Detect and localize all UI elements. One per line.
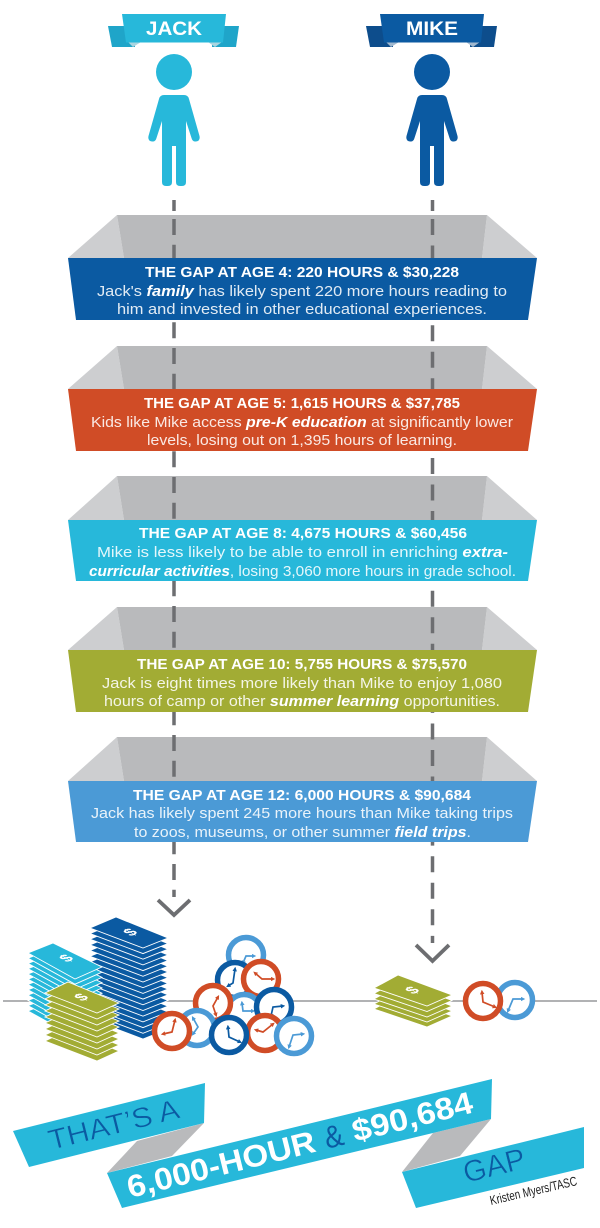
panel: gap at age 10: THE GAP AT AGE 10: 5,755 HOURS & $75,570 (137, 656, 467, 673)
box back: age 8 (68, 476, 537, 520)
panel: gap at age 12: Jack has likely spent 245 more hours than Mike taking trips (91, 805, 513, 822)
panel: gap at age 4: THE GAP AT AGE 4: 220 HOURS & $30,228 (145, 264, 459, 281)
ribbon: 6,000-hour and $90,684: & (320, 1117, 347, 1156)
ground line (3, 1000, 597, 1002)
box back: age 4 (68, 215, 537, 258)
icon: Mike figure (406, 54, 458, 186)
panel: gap at age 12: to zoos, museums, or other summer field trips . (134, 824, 471, 841)
ribbon: gap: GAP (460, 1143, 529, 1190)
panel: gap at age 5 (68, 389, 537, 451)
panel: gap at age 12: THE GAP AT AGE 12: 6,000 HOURS & $90,684 (133, 787, 472, 804)
arrow: Mike dashed path (416, 200, 449, 961)
icon: Mike money stack (374, 975, 452, 1027)
ribbon: gap (402, 1127, 584, 1208)
panel: gap at age 5: levels, losing out on 1,395 hours of learning. (147, 432, 457, 449)
box back: age 10 (68, 607, 537, 650)
panel: gap at age 12 (68, 781, 537, 842)
panel: gap at age 8 (68, 520, 537, 581)
panel: gap at age 5: THE GAP AT AGE 5: 1,615 HOURS & $37,785 (144, 395, 460, 412)
panel: gap at age 8: THE GAP AT AGE 8: 4,675 HOURS & $60,456 (139, 525, 467, 542)
icon: dark blue money stack: $ (120, 926, 142, 939)
icon: Jack clock pile (154, 938, 312, 1054)
box back: age 12 (68, 737, 537, 781)
arrow: Jack dashed path (158, 200, 190, 915)
ribbon: 6,000-hour and $90,684 (107, 1079, 492, 1208)
icon: dark blue money stack (90, 917, 168, 1039)
icon: olive money stack (45, 982, 119, 1061)
ribbon: 6,000-hour and $90,684: 6,000-HOUR (123, 1124, 319, 1205)
panel: gap at age 10: hours of camp or other summer learning opportunities. (104, 693, 500, 710)
banner: Jack (108, 14, 239, 47)
panel: gap at age 4: him and invested in other educational experiences. (117, 301, 487, 318)
box back: age 5 (68, 346, 537, 389)
icon: Jack figure (148, 54, 200, 186)
panel: gap at age 10: Jack is eight times more likely than Mike to enjoy 1,080 (102, 675, 502, 692)
icon: cyan money stack: $ (56, 952, 78, 965)
panel: gap at age 8: curricular activities, losing 3,060 more hours in grade school. (89, 563, 516, 580)
panel: gap at age 5: Kids like Mike access pre-K education at significantly lower (91, 414, 513, 431)
panel: gap at age 4: Jack's family has likely spent 220 more hours reading to (97, 283, 507, 300)
ribbon: 6,000-hour and $90,684: $90,684 (348, 1085, 477, 1149)
banner: Mike: MIKE (406, 19, 458, 40)
panel: gap at age 4 (68, 258, 537, 320)
ribbon: That's a (13, 1083, 205, 1173)
panel: gap at age 8: Mike is less likely to be able to enroll in enriching extra- (97, 544, 508, 561)
ribbon: That's a: THAT’S A (45, 1093, 183, 1156)
icon: Mike clocks (466, 982, 532, 1018)
icon: cyan money stack (28, 943, 102, 1037)
banner: Mike (366, 14, 497, 47)
icon: olive money stack: $ (71, 991, 93, 1004)
banner: Jack: JACK (146, 19, 202, 40)
icon: Mike money stack: $ (402, 984, 424, 997)
panel: gap at age 10 (68, 650, 537, 712)
